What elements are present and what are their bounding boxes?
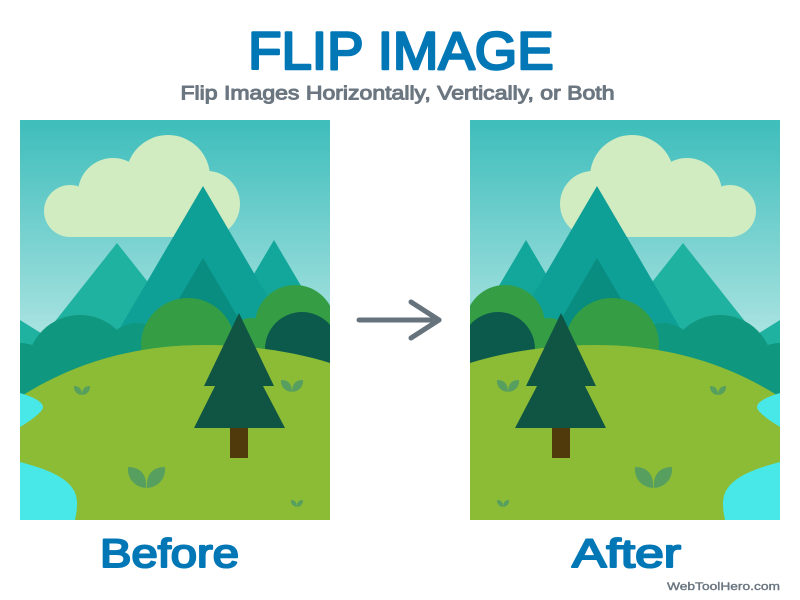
- label: before: Before: [100, 532, 239, 576]
- bushes: green: [141, 285, 330, 350]
- label: after: After: [572, 532, 681, 576]
- mountain: inner shade: [562, 258, 621, 328]
- icon: medium sprout: [281, 380, 303, 392]
- cloud: [44, 135, 240, 237]
- title: FLIP IMAGE: [248, 22, 554, 81]
- icon: tiny sprout: [497, 500, 509, 507]
- bush: dark: [470, 312, 535, 363]
- icon: small sprout: [710, 386, 726, 395]
- mountain: wide: [652, 243, 745, 330]
- ground hill: [20, 345, 330, 520]
- icon: tiny sprout: [291, 500, 303, 507]
- bushes: green: [470, 285, 659, 350]
- mountain: main: [120, 186, 254, 328]
- water: upper: [20, 393, 43, 427]
- icon: medium sprout: [497, 380, 519, 392]
- mountain: inner shade: [179, 258, 238, 328]
- panel: after image: [461, 120, 800, 520]
- sky: [470, 120, 780, 346]
- bush: dark: [265, 312, 330, 363]
- icon: small sprout: [74, 386, 90, 395]
- mountain: left: [55, 243, 148, 330]
- mountain: main: [546, 186, 680, 328]
- water: lower: [723, 462, 780, 520]
- water: upper: [757, 393, 780, 427]
- tree crown: [194, 313, 285, 428]
- mountain: far edge: [760, 320, 780, 345]
- icon: large sprout: [128, 467, 165, 488]
- subtitle: Flip Images Horizontally, Vertically, or Both: [180, 84, 614, 104]
- arrow: [359, 302, 439, 338]
- icon: large sprout: [635, 467, 672, 488]
- mountain: right: [254, 240, 301, 296]
- tree trunk: [230, 428, 248, 458]
- hills: dark teal: [20, 315, 146, 394]
- mountain: far left: [20, 320, 40, 345]
- mountain: narrow: [499, 240, 546, 296]
- hills: dark teal: [654, 315, 780, 394]
- sky: [20, 120, 330, 346]
- watermark: WebToolHero.com: [667, 581, 780, 593]
- tree trunk: [552, 428, 570, 458]
- cloud: [560, 135, 756, 237]
- ground hill: [470, 345, 780, 520]
- panel: before image: [0, 120, 339, 520]
- water: lower: [20, 462, 77, 520]
- tree crown: [515, 313, 606, 428]
